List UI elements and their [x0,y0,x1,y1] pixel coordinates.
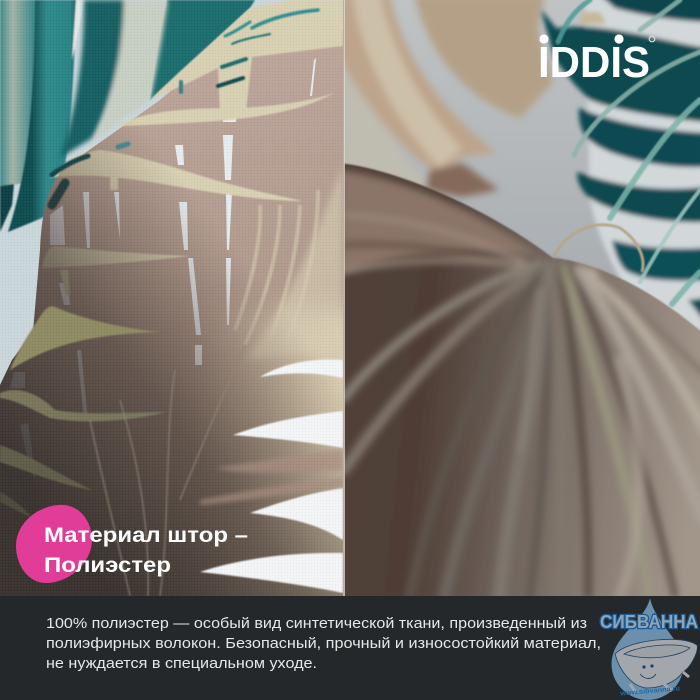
panel edge between photos [343,0,345,596]
watermark tub feet [630,672,689,693]
white gaps between frond blades [10,58,316,480]
teal tips on frond [52,10,318,205]
thin curved stem [554,225,643,272]
fan leaf ribs [344,215,700,596]
white blades, right side [200,360,343,593]
pink blob accent [16,505,92,583]
teal folded leaf bands [0,0,255,232]
watermark name: СИБВАННА [600,612,698,632]
warm cream right side of the frond [224,302,343,596]
heading: Полиэстер [44,554,171,577]
body text [46,615,601,672]
body text: не нуждается в специальном уходе. [46,655,317,672]
pale teal veins [558,0,700,304]
watermark: Sibvanna water drop [600,598,698,700]
palm frond [0,0,370,610]
logo: IDDIS: IDDIS [538,38,650,87]
watermark tub [615,639,697,688]
body text: полиэфирных волокон. Безопасный, прочный и износостойкий материал, [46,635,601,652]
watermark tub face [642,665,646,669]
pale strands on frond [235,190,318,345]
cream blades [42,0,343,295]
tan blade details [200,450,343,505]
teal and white striped leaf [541,0,700,330]
heading [44,524,248,577]
body text: 100% полиэстер — особый вид синтетической ткани, произведенный из [46,615,587,632]
panel: blurred leaf photo, right [340,0,700,600]
panel: fabric close-up photo, left [0,0,370,610]
lower frond shading [0,128,343,596]
woven fabric texture [0,0,343,596]
blurred brown fan leaf [340,163,700,600]
footer band [0,596,700,700]
olive blades [0,306,166,518]
blurred beige leaves [340,0,553,200]
heading: Материал штор – [44,524,248,547]
thin stems over dark zone [89,370,224,596]
watermark url: www.sibvanna.ru [619,685,680,698]
